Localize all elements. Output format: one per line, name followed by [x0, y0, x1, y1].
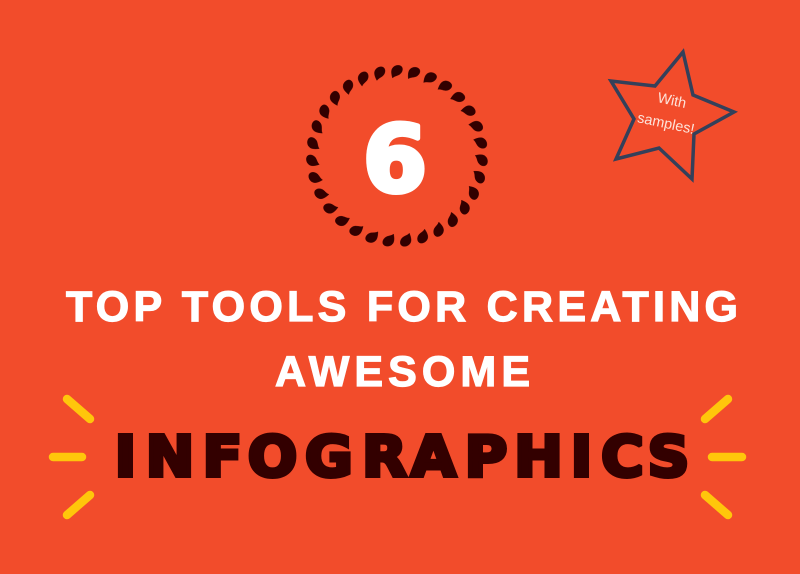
droplet ring [306, 65, 488, 247]
star badge [611, 52, 734, 179]
star label [636, 90, 696, 138]
star label: samples! [636, 110, 696, 138]
right rays [705, 399, 742, 515]
star outline [611, 52, 734, 179]
star label: With [656, 90, 688, 112]
left rays [53, 399, 90, 515]
number 6: 6 [363, 106, 427, 213]
headline: INFOGRAPHICS [115, 425, 689, 490]
title line 2: AWESOME [275, 348, 530, 396]
title line 1: TOP TOOLS FOR CREATING [66, 283, 738, 331]
